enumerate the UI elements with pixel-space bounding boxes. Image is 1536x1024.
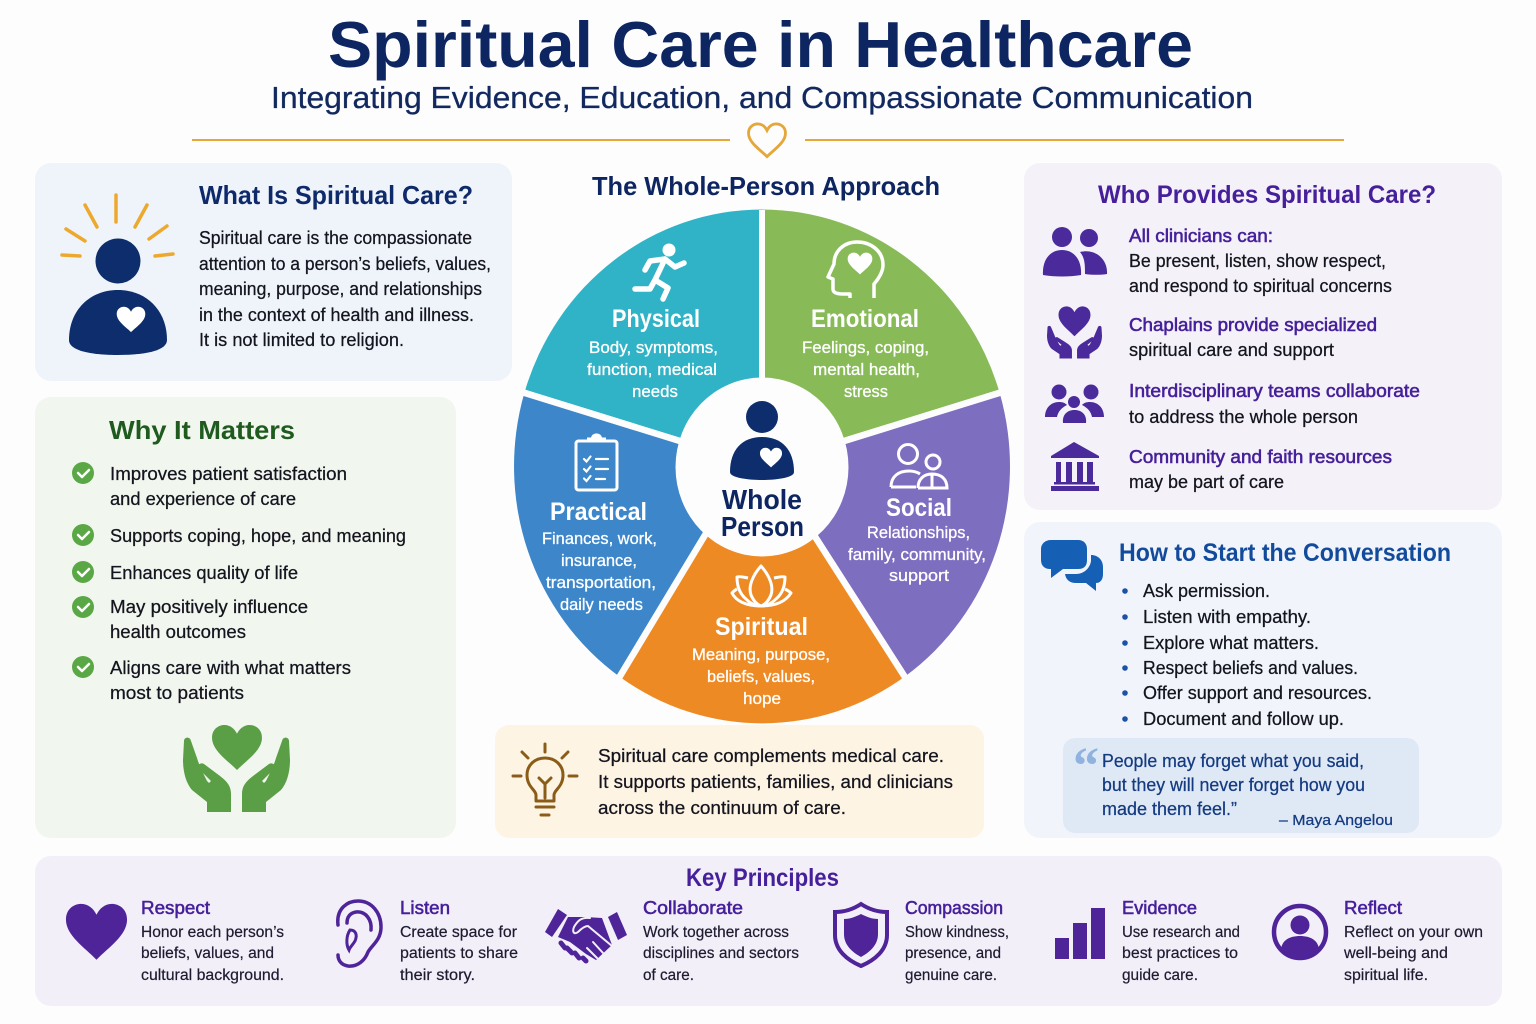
text: quote: made them feel.”	[1102, 799, 1237, 819]
text: social details	[848, 523, 986, 585]
text: social details: family, community,	[848, 545, 986, 564]
panel: why it matters	[35, 397, 456, 838]
icon: building with columns	[1051, 442, 1099, 491]
icon: head with heart	[828, 242, 883, 298]
icon: handshake	[545, 909, 627, 961]
principle: compassion	[835, 898, 1009, 984]
text: quote: but they will never forget how you	[1102, 775, 1365, 795]
list: conversation steps: Listen with empathy.	[1143, 607, 1311, 627]
icon: speech bubbles	[1041, 540, 1103, 591]
text: quote: People may forget what you said,	[1102, 751, 1364, 771]
text: physical details: function, medical	[587, 360, 717, 379]
text: spiritual details: hope	[743, 689, 781, 708]
label: practical: Practical	[550, 498, 647, 526]
heading: whole-person approach: The Whole-Person Approach	[592, 171, 940, 201]
text: evidence: guide care.	[1122, 967, 1198, 984]
list: conversation steps: Ask permission.	[1143, 581, 1270, 601]
text: all clinicians: Be present, listen, show respect,	[1129, 251, 1386, 271]
icon: two people	[1043, 227, 1107, 276]
text: interdisciplinary teams: to address the whole person	[1129, 407, 1358, 427]
text: collaborate	[643, 898, 799, 984]
text: complements medical care: Spiritual care complements medical care.	[598, 746, 944, 766]
label: whole person	[721, 484, 804, 542]
text: social details: support	[889, 566, 949, 585]
text: listen: their story.	[400, 967, 475, 984]
list: conversation steps	[1122, 581, 1372, 729]
list: reasons: most to patients	[110, 683, 244, 703]
principle: reflect	[1274, 898, 1483, 984]
text: spiritual details: beliefs, values,	[707, 667, 815, 686]
text: respect	[141, 898, 284, 984]
icons: check marks	[72, 462, 94, 678]
label: physical: Physical	[612, 305, 700, 333]
icon: running person	[635, 244, 684, 299]
text: quote	[1102, 751, 1365, 819]
segment: practical	[514, 392, 762, 686]
text: practical details: insurance,	[561, 551, 637, 570]
text: reflect	[1343, 898, 1483, 984]
text: interdisciplinary teams	[1129, 381, 1420, 427]
text: complements medical care	[598, 746, 953, 818]
list: reasons: Improves patient satisfaction	[110, 464, 347, 484]
panel: what is spiritual care	[35, 163, 512, 381]
text: reflect: well-being and	[1343, 945, 1448, 962]
label: whole person: Person	[721, 511, 804, 542]
text: emotional details: Feelings, coping,	[802, 338, 929, 357]
callout: maya angelou quote	[1063, 738, 1419, 833]
text: definition: attention to a person’s beliefs, values,	[199, 254, 491, 274]
text: reflect: Reflect on your own	[1344, 924, 1483, 941]
text: chaplains: spiritual care and support	[1129, 340, 1334, 360]
panel: who provides spiritual care	[1024, 163, 1502, 510]
list: conversation steps: Document and follow up.	[1143, 709, 1344, 729]
text: practical details: daily needs	[560, 595, 643, 614]
heading: why it matters: Why It Matters	[109, 415, 295, 445]
icon: ear	[338, 901, 381, 966]
text: definition: Spiritual care is the compassionate	[199, 228, 472, 248]
list: reasons: health outcomes	[110, 622, 246, 642]
list: reasons: and experience of care	[110, 489, 296, 509]
icon: person with heart	[730, 401, 794, 480]
text: compassion	[905, 898, 1009, 984]
text: chaplains	[1129, 315, 1377, 360]
panel: key principles	[35, 856, 1502, 1006]
text: collaborate: Collaborate	[643, 898, 743, 918]
text: definition	[199, 228, 491, 350]
subtitle: Integrating Evidence, Education, and Compassionate Communication	[271, 80, 1253, 115]
heading: who provides spiritual care: Who Provides Spiritual Care?	[1098, 181, 1436, 209]
principle: collaborate	[545, 898, 799, 984]
principle: respect	[66, 898, 284, 984]
text: community resources: Community and faith resources	[1129, 447, 1392, 467]
text: evidence	[1122, 898, 1240, 984]
segment: physical	[520, 210, 762, 466]
text: emotional details: stress	[844, 382, 888, 401]
icon: person in circle	[1274, 906, 1326, 958]
icon: person with radiating light	[62, 195, 173, 355]
text: complements medical care: It supports patients, families, and clinicians	[598, 772, 953, 792]
center: whole person	[676, 378, 848, 556]
list: reasons: Supports coping, hope, and meaning	[110, 526, 406, 546]
text: complements medical care: across the continuum of care.	[598, 798, 846, 818]
label: spiritual: Spiritual	[715, 613, 808, 641]
text: spiritual details	[692, 645, 830, 708]
text: evidence: best practices to	[1122, 945, 1238, 962]
text: interdisciplinary teams: Interdisciplinary teams collaborate	[1129, 381, 1420, 401]
heading: how to start the conversation: How to Start the Conversation	[1119, 539, 1451, 567]
icon: heart divider	[749, 124, 785, 157]
panel: complements medical care	[495, 725, 984, 838]
text: listen: Create space for	[400, 924, 517, 941]
text: definition: in the context of health and illness.	[199, 305, 474, 325]
text: emotional details	[802, 338, 929, 401]
text: respect: Respect	[141, 898, 210, 918]
text: chaplains: Chaplains provide specialized	[1129, 315, 1377, 335]
segment: spiritual	[614, 466, 910, 723]
label: emotional: Emotional	[811, 305, 919, 333]
text: attribution: – Maya Angelou	[1279, 812, 1393, 829]
icon: light bulb	[513, 744, 577, 815]
text: collaborate: of care.	[643, 967, 694, 984]
text: community resources	[1129, 447, 1392, 492]
text: spiritual details: Meaning, purpose,	[692, 645, 830, 664]
icon: heart	[66, 904, 127, 960]
text: listen	[400, 898, 518, 984]
text: social details: Relationships,	[867, 523, 970, 542]
text: community resources: may be part of care	[1129, 472, 1284, 492]
text: all clinicians: and respond to spiritual concerns	[1129, 276, 1392, 296]
icon: hands with heart	[1047, 306, 1102, 359]
icon: clipboard checklist	[576, 434, 617, 490]
icon: shield	[835, 904, 887, 966]
icon: hands holding heart	[183, 725, 290, 812]
list: reasons: May positively influence	[110, 597, 308, 617]
principle: listen	[338, 898, 518, 984]
heading: key principles: Key Principles	[686, 864, 839, 892]
text: listen: patients to share	[400, 945, 518, 962]
text: physical details	[587, 338, 718, 401]
list: reasons	[110, 464, 406, 703]
icon: team	[1045, 384, 1104, 423]
text: reflect: spiritual life.	[1344, 967, 1428, 984]
text: practical details: Finances, work,	[542, 529, 657, 548]
text: collaborate: disciplines and sectors	[643, 945, 799, 962]
text: physical details: needs	[632, 382, 678, 401]
icon: quotation mark: “	[1073, 738, 1099, 795]
text: definition: It is not limited to religion.	[199, 330, 404, 350]
text: evidence: Use research and	[1122, 924, 1240, 941]
text: compassion: Compassion	[905, 898, 1003, 918]
label: whole person: Whole	[722, 484, 802, 515]
label: social: Social	[886, 494, 952, 522]
text: physical details: Body, symptoms,	[589, 338, 718, 357]
text: compassion: presence, and	[905, 945, 1001, 962]
icon: two people	[891, 444, 947, 488]
segment: emotional	[762, 210, 1004, 466]
list: conversation steps: Explore what matters.	[1143, 633, 1319, 653]
text: collaborate: Work together across	[643, 924, 789, 941]
text: practical details	[542, 529, 657, 614]
list: conversation steps: Respect beliefs and values.	[1143, 658, 1358, 678]
text: compassion: genuine care.	[905, 967, 997, 984]
chart: whole-person wheel	[514, 210, 1010, 723]
text: definition: meaning, purpose, and relationships	[199, 279, 482, 299]
icon: lotus	[732, 566, 791, 606]
segment: social	[762, 392, 1010, 685]
text: emotional details: mental health,	[813, 360, 920, 379]
text: listen: Listen	[400, 898, 450, 918]
text: respect: Honor each person’s	[141, 924, 284, 941]
list: conversation steps: Offer support and resources.	[1143, 683, 1372, 703]
text: reflect: Reflect	[1344, 898, 1402, 918]
heading: what is spiritual care: What Is Spiritual Care?	[199, 180, 473, 210]
panel: how to start the conversation	[1024, 522, 1502, 838]
list: reasons: Aligns care with what matters	[110, 658, 351, 678]
text: respect: beliefs, values, and	[141, 945, 274, 962]
text: all clinicians	[1129, 226, 1392, 296]
text: practical details: transportation,	[546, 573, 656, 592]
icon: bar chart	[1055, 908, 1105, 959]
title: Spiritual Care in Healthcare	[328, 8, 1193, 81]
text: evidence: Evidence	[1122, 898, 1197, 918]
text: all clinicians: All clinicians can:	[1129, 226, 1273, 246]
list: reasons: Enhances quality of life	[110, 563, 298, 583]
text: compassion: Show kindness,	[905, 924, 1009, 941]
principle: evidence	[1055, 898, 1240, 984]
text: respect: cultural background.	[141, 967, 284, 984]
